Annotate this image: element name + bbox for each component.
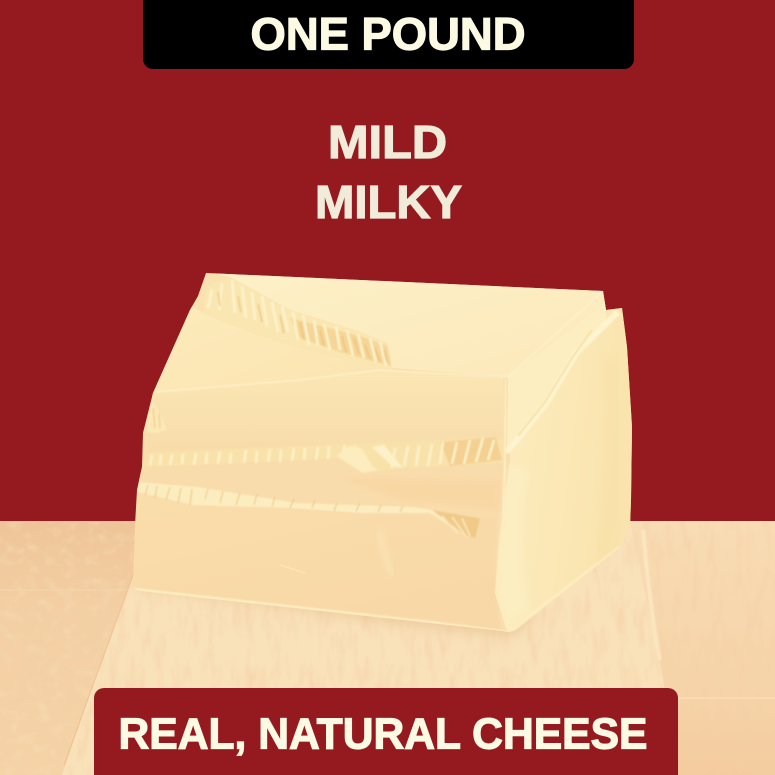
right side face <box>495 291 640 640</box>
left slope face <box>152 306 283 396</box>
red background <box>0 0 775 522</box>
black label: one pound <box>143 0 634 69</box>
lower face faint marks <box>280 565 305 573</box>
flavor descriptors <box>315 116 462 228</box>
middle band warm shade <box>340 478 500 510</box>
upper plate beside the crack <box>507 300 606 450</box>
torn ridge: lower front <box>137 482 503 538</box>
side crack ridge <box>506 312 618 452</box>
torn ridge: top left <box>203 277 392 370</box>
cheese block <box>125 265 640 640</box>
bottom edge highlight <box>133 547 620 632</box>
front corner edge <box>503 379 506 518</box>
soft curved shading on right face <box>498 470 526 630</box>
red label: real, natural cheese <box>94 688 678 775</box>
wood cutting board <box>0 521 775 775</box>
top edge highlights <box>157 307 586 393</box>
descriptor: milky: MILKY <box>315 176 462 228</box>
torn ridge: upper front <box>142 437 504 473</box>
broken cheese chunks <box>337 446 378 473</box>
label text: one pound: ONE POUND <box>250 8 526 60</box>
label text: real natural cheese: REAL, NATURAL CHEESE <box>118 710 648 758</box>
cheese body <box>125 265 640 640</box>
cast shadow <box>128 578 540 636</box>
middle front band <box>138 467 142 482</box>
upper front band <box>143 394 153 433</box>
descriptor: mild: MILD <box>328 116 447 168</box>
cheese base colour <box>125 265 640 640</box>
left edge fracture <box>147 408 166 432</box>
top face <box>200 270 606 377</box>
